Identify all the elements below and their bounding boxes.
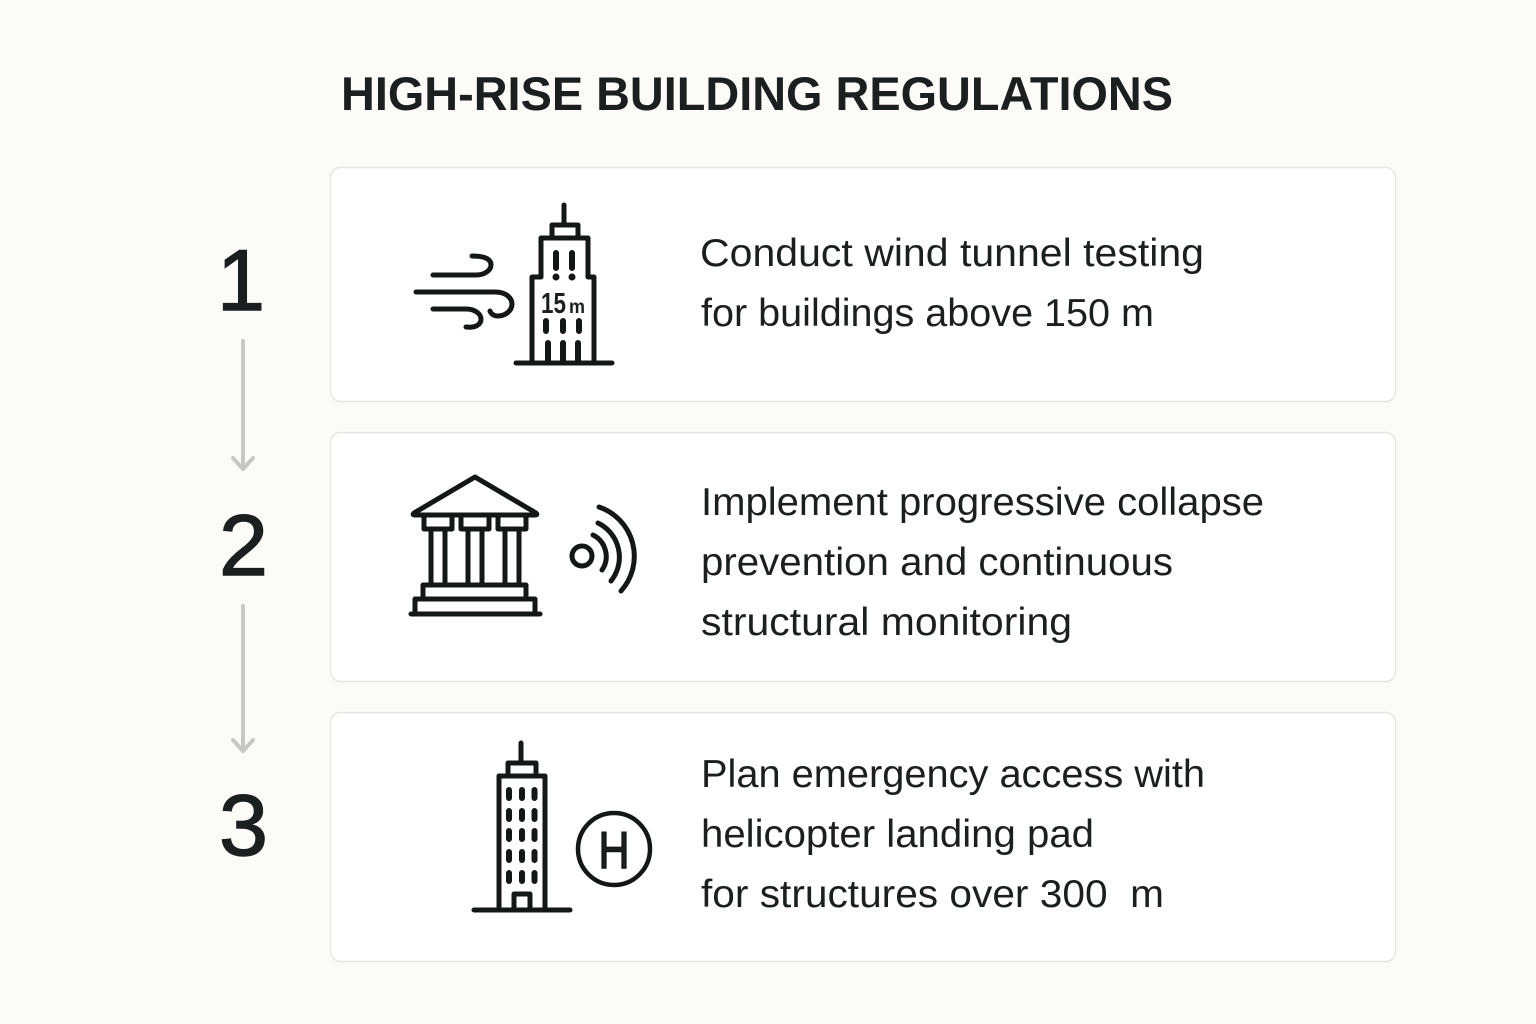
- icon: classical building with sensor: [411, 477, 634, 614]
- arrow: step 1 to step 2: [233, 341, 253, 469]
- panel: wind tunnel testing: [330, 168, 1396, 402]
- icon: wind and tower: m: [569, 297, 585, 318]
- text: wind tunnel requirement: Conduct wind tunnel testing: [700, 232, 1204, 275]
- step number 2: 2: [219, 498, 268, 594]
- arrow: step 2 to step 3: [233, 606, 253, 751]
- text: collapse prevention requirement: Implement progressive collapse: [701, 481, 1264, 524]
- text: emergency access requirement: helicopter landing pad: [701, 813, 1094, 856]
- icon: wind and tower: [416, 205, 612, 363]
- text: wind tunnel requirement: [700, 232, 1204, 335]
- panel: emergency access: [330, 712, 1396, 962]
- text: emergency access requirement: Plan emergency access with: [701, 753, 1205, 796]
- panel: progressive collapse prevention: [330, 432, 1396, 682]
- text: collapse prevention requirement: prevention and continuous: [701, 541, 1173, 584]
- icon: wind and tower: 15: [541, 288, 566, 320]
- text: emergency access requirement: [701, 753, 1205, 916]
- text: collapse prevention requirement: [701, 481, 1264, 644]
- text: collapse prevention requirement: structural monitoring: [701, 601, 1072, 644]
- icon: tower with helipad: H: [598, 822, 630, 880]
- icon: tower with helipad: [474, 743, 650, 910]
- step number 3: 3: [219, 778, 268, 874]
- title: HIGH-RISE BUILDING REGULATIONS: [341, 67, 1173, 120]
- text: wind tunnel requirement: for buildings above 150 m: [701, 292, 1154, 335]
- step number 1: 1: [217, 233, 265, 329]
- text: emergency access requirement: for structures over 300 m: [701, 873, 1164, 916]
